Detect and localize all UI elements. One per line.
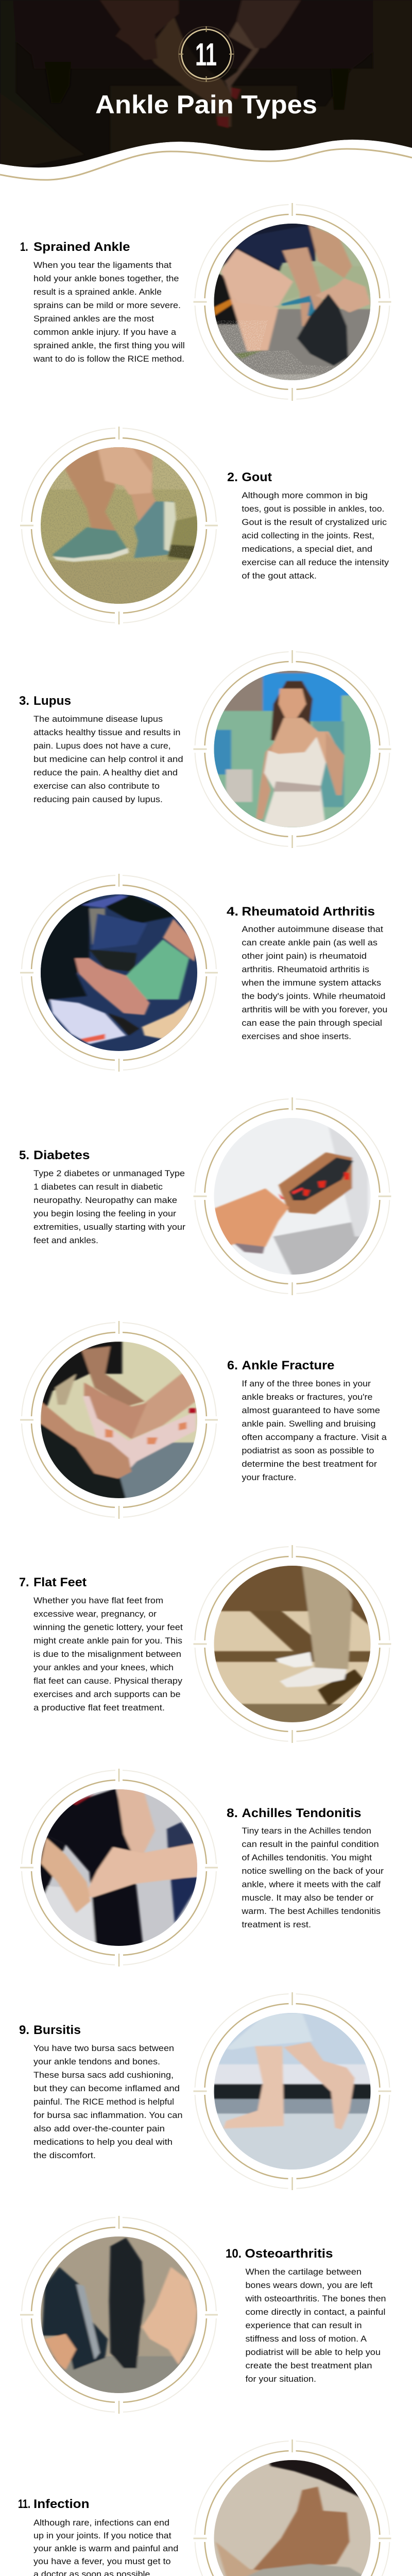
heading: 1. [20,240,28,254]
body text: reducing pain caused by lupus. [33,794,163,804]
body text: arthritis. Rheumatoid arthritis is [242,964,369,974]
heading: Flat Feet [33,1575,87,1589]
heading: Lupus [33,694,71,708]
body text [33,714,183,804]
heading: Bursitis [33,2023,81,2037]
body text: Gout is the result of crystalized uric [242,517,387,527]
body text: the body's joints. While rheumatoid [242,991,385,1001]
body text: but they can become inflamed and [33,2083,180,2093]
ring frame [20,874,218,1072]
title: Ankle Pain Types [95,90,317,119]
body text: attacks healthy tissue and results in [33,727,180,737]
body text: your ankles and your knees, which [33,1663,174,1672]
body text: acid collecting in the joints. Rest, [242,531,374,540]
body text: bones wears down, you are left [245,2280,373,2290]
heading: 4. [227,905,238,919]
body text: Although more common in big [242,490,368,500]
panel: 6 Ankle Fracture [20,1321,387,1519]
body text [242,1379,387,1482]
body text: ankle, where it meets with the calf [242,1879,381,1889]
ring frame [194,1992,391,2190]
heading: Rheumatoid Arthritis [242,905,375,919]
body text: is due to the misalignment between [33,1649,181,1659]
panel: 10 Osteoarthritis [20,2216,386,2414]
photo: woman in white dress [213,670,373,828]
body text: can create ankle pain (as well as [242,938,377,947]
body text: also add over-the-counter pain [33,2124,165,2133]
photo: socked feet on wood floor [213,1565,373,1723]
heading: 7. [19,1575,29,1589]
panel: 7 Flat Feet [19,1545,391,1743]
heading: Osteoarthritis [245,2247,333,2261]
body text: reduce the pain. A healthy diet and [33,768,178,777]
heading: Ankle Fracture [242,1359,334,1372]
body text [245,2267,386,2384]
body text: with osteoarthritis. The bones then [245,2294,386,2303]
photo: therapist pressing achilles [40,1789,198,1947]
heading: 2. [227,470,238,484]
body text: Sprained ankles are the most [33,314,154,324]
body text: come directly in contact, a painful [245,2307,385,2317]
body text: sprained ankle, the first thing you will [33,341,185,350]
heading: 9. [19,2023,29,2037]
panel: 11 Infection [18,2439,391,2576]
body text: want to do is follow the RICE method. [33,354,184,364]
heading [227,470,272,484]
body text: The autoimmune disease lupus [33,714,163,724]
body text [242,490,389,581]
gold wave line [0,149,412,180]
photo: running shoes and bare feet [40,2236,200,2394]
body text [33,260,185,364]
panel: 3 Lupus [19,650,391,848]
ring frame [194,650,391,848]
body text: create the best treatment plan [245,2361,372,2370]
heading: 6. [227,1359,238,1372]
heading: 8. [227,1806,238,1820]
body text: muscle. It may also be tender or [242,1893,374,1903]
body text: winning the genetic lottery, your feet [33,1622,183,1632]
panel: 1 Sprained Ankle [20,203,391,401]
body text: determine the best treatment for [242,1459,377,1469]
photo: climber holding ankle [213,222,373,381]
heading: Achilles Tendonitis [242,1806,361,1820]
ring frame [20,1321,218,1519]
body text: podiatrist will be able to help you [245,2347,381,2357]
photo: bare feet walking [213,2013,373,2171]
body text: for bursa sac inflammation. You can [33,2110,183,2120]
body text: ankle pain. Swelling and bruising [242,1419,375,1429]
number badge rings [179,26,234,82]
body text: Another autoimmune disease that [242,924,383,934]
panel: header [0,0,412,180]
body text: when the immune system attacks [241,978,381,988]
grass texture [41,447,197,604]
body text: neuropathy. Neuropathy can make [33,1195,177,1205]
body text: for your situation. [245,2374,316,2384]
body text [33,1596,183,1713]
heading: 5. [19,1148,29,1162]
panel: 4 Rheumatoid Arthritis [20,874,387,1072]
body text: can ease the pain through special [242,1018,382,1028]
ring frame [194,1545,391,1743]
body text: your ankle tendons and bones. [33,2057,160,2066]
body text: sprains can be mild or more severe. [33,300,181,310]
body text: exercise can also contribute to [33,781,160,791]
photo: glucose meter in hands [213,1118,371,1281]
body text: ankle breaks or fractures, you're [242,1392,372,1402]
body text: exercises and arch supports can be [33,1689,180,1699]
heading: 11. [18,2497,30,2511]
panel: 2 Gout [20,427,389,624]
body text: warm. The best Achilles tendonitis [241,1906,381,1916]
body text: might create ankle pain for you. This [33,1636,182,1646]
body text: often accompany a fracture. Visit a [242,1432,387,1442]
panel: 5 Diabetes [19,1097,391,1295]
body text: up in your joints. If you notice that [33,2531,171,2540]
body text: common ankle injury. If you have a [33,327,177,337]
heading: Diabetes [33,1148,90,1162]
body text: medications to help you deal with [33,2137,173,2147]
body text [33,2518,178,2576]
body text [241,924,387,1041]
body text: of the gout attack. [242,571,317,581]
gravel texture [216,320,352,380]
body text: When the cartilage between [245,2267,362,2277]
heading: 10. [226,2247,242,2261]
body text: When you tear the ligaments that [33,260,171,270]
body text: experience that can result in [245,2320,362,2330]
body text: almost guaranteed to have some [242,1405,380,1415]
body text: excessive wear, pregnancy, or [33,1609,157,1619]
body text: but medicine can help control it and [33,754,183,764]
heading: Sprained Ankle [33,240,130,254]
body text: Tiny tears in the Achilles tendon [242,1826,371,1836]
ring frame [194,1097,391,1295]
header background photo [0,0,412,175]
ring frame [194,2439,391,2576]
heading number 11: 11 [195,37,217,73]
body text [241,1826,384,1929]
body text: arthritis will be with you forever, you [242,1005,387,1014]
body text: flat feet can cause. Physical therapy [33,1676,183,1686]
ring frame [194,203,391,401]
body text: the discomfort. [33,2150,96,2160]
body text: painful. The RICE method is helpful [33,2097,174,2107]
body text: you have a fever, you must get to [33,2556,171,2566]
body text: These bursa sacs add cushioning, [33,2070,174,2080]
body text: medications, a special diet, and [242,544,372,554]
photo: ankle taping [40,893,197,1051]
body text: pain. Lupus does not have a cure, [33,741,171,751]
heading: Infection [33,2497,90,2511]
body text: a productive flat feet treatment. [33,1703,165,1713]
body text: treatment is rest. [242,1920,311,1929]
body text: toes, gout is possible in ankles, too. [242,504,384,514]
body text: exercise can all reduce the intensity [242,557,389,567]
body text: hold your ankle bones together, the [33,274,179,283]
body text: podiatrist as soon as possible to [242,1446,374,1455]
body text: Type 2 diabetes or unmanaged Type [33,1168,185,1178]
ring frame [20,2216,218,2414]
panel: 8 Achilles Tendonitis [20,1769,384,1967]
heading: Gout [242,470,272,484]
body text: result is a sprained ankle. Ankle [33,287,162,297]
heading: 3. [19,694,29,708]
body text: feet and ankles. [33,1235,98,1245]
ring frame [20,427,218,624]
body text: your fracture. [242,1472,296,1482]
body text: extremities, usually starting with your [33,1222,185,1232]
body text [33,2043,183,2160]
ring frame [20,1769,218,1967]
body text: your ankle is warm and painful and [33,2544,178,2553]
body text [33,1168,185,1245]
body text: If any of the three bones in your [242,1379,371,1388]
body text: notice swelling on the back of your [242,1866,384,1876]
body text: other joint pain) is rheumatoid [242,951,367,961]
body text: can result in the painful condition [242,1839,379,1849]
body text: stiffness and loss of motion. A [245,2334,367,2344]
body text: You have two bursa sacs between [33,2043,174,2053]
panel: 9 Bursitis [19,1992,391,2190]
photo: foot in splint [40,1341,200,1499]
photo: feet in bed sheets [214,2459,373,2576]
body text: Although rare, infections can end [33,2518,169,2528]
body text: 1 diabetes can result in diabetic [33,1182,163,1192]
body text: exercises and shoe inserts. [242,1031,351,1041]
photo: runner on grass [40,447,200,604]
body text: you begin losing the feeling in your [33,1209,176,1218]
body text: Whether you have flat feet from [33,1596,163,1605]
body text: of Achilles tendonitis. You might [242,1853,372,1862]
